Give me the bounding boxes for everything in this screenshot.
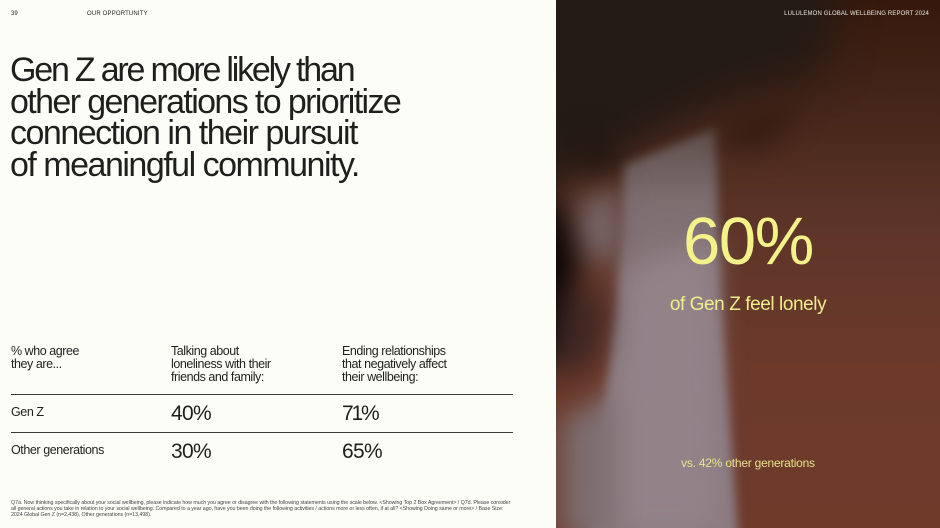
column header: talking about loneliness: Talking about (171, 344, 239, 358)
page number: 39 (11, 11, 18, 17)
column header: ending relationships (342, 344, 447, 384)
statistic caption: of Gen Z feel lonely (670, 294, 826, 315)
title: other generations to prioritize (10, 83, 400, 121)
title: Gen Z are more likely than (10, 51, 353, 89)
value: Gen Z ending: 71% (342, 402, 377, 425)
light column (586, 128, 738, 528)
column header: ending relationships: that negatively affect (342, 356, 447, 370)
big statistic: 60% (683, 204, 813, 279)
section label: OUR OPPORTUNITY (87, 11, 148, 17)
photo panel (556, 0, 940, 528)
footnote (11, 500, 510, 518)
row label: Gen Z: Gen Z (11, 405, 44, 419)
value: other generations talking: 30% (171, 440, 211, 463)
column header: % who agree: they are... (11, 356, 62, 370)
value: Gen Z talking: 40% (171, 402, 211, 425)
table (11, 344, 513, 463)
title (10, 51, 400, 184)
column header: ending relationships: Ending relationships (342, 344, 446, 358)
row label: Other generations: Other generations (11, 443, 104, 457)
comparison note: vs. 42% other generations (681, 456, 815, 470)
dark left edge (526, 98, 806, 385)
column header: talking about loneliness: loneliness with their (171, 356, 271, 370)
column header: talking about loneliness (171, 344, 271, 384)
footnote: all general actions you take in relation to your social wellbeing. Compared to a year ago, have you been doing the following activities / actions more or less often, if at all? <Showing Doing same or more> / Base Size: (11, 506, 503, 512)
column header: ending relationships: their wellbeing: (342, 370, 418, 384)
footnote: Q7a. Now thinking specifically about your social wellbeing, please indicate how much you agree or disagree with the following statements using the scale below. <Showing Top 2 Box Agreement> / Q7d. Please consider (11, 500, 510, 506)
column header: % who agree (11, 344, 79, 370)
column header: % who agree: % who agree (11, 344, 79, 358)
title: connection in their pursuit (10, 114, 357, 152)
value: other generations ending: 65% (342, 440, 382, 463)
dark top-left shadow (516, 0, 846, 210)
title: of meaningful community. (10, 146, 359, 184)
report title: LULULEMON GLOBAL WELLBEING REPORT 2024 (784, 11, 929, 17)
column header: talking about loneliness: friends and family: (171, 370, 264, 384)
footnote: 2024 Global Gen Z (n=2,438), Other generations (n=13,498). (11, 512, 151, 518)
